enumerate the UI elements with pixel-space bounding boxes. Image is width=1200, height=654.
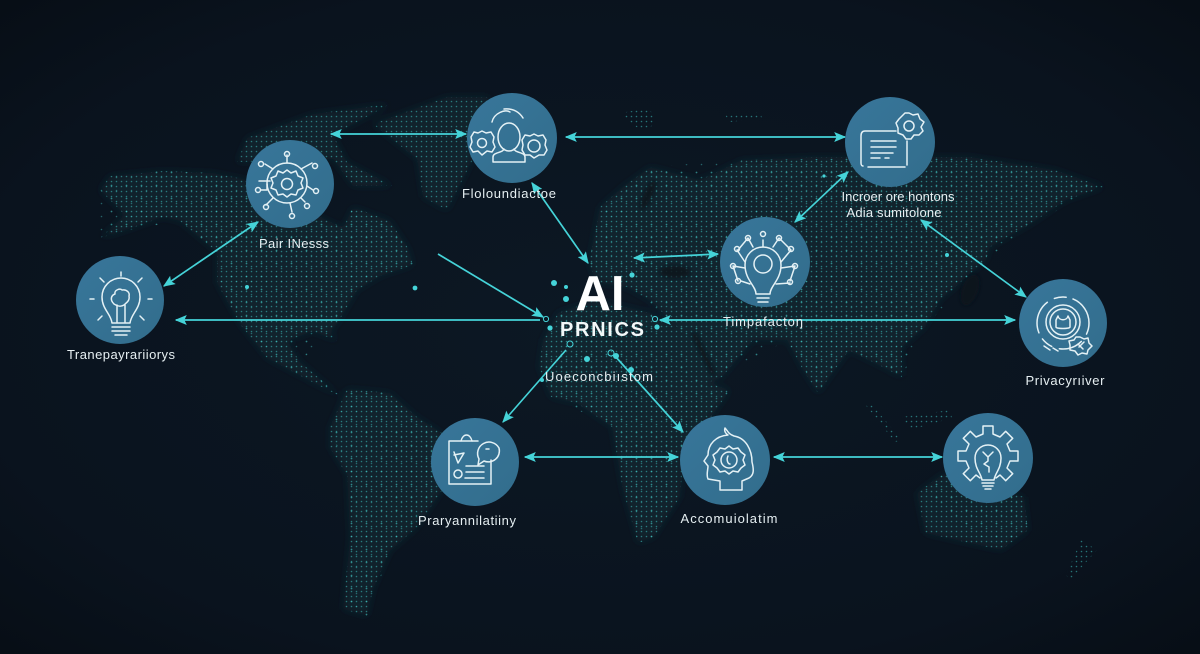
central title: PRNICS <box>560 319 644 341</box>
label: center lower: Uoeconcbiıstom <box>545 369 653 384</box>
icon: clipboard and speech bubble <box>449 435 499 484</box>
label: Accomuiolatim <box>680 511 778 526</box>
node: privacy <box>1019 279 1107 388</box>
node: accountability <box>680 415 778 526</box>
label: Pair INesss <box>259 236 330 251</box>
central title: AI <box>576 267 624 321</box>
connector arrows <box>164 134 1026 457</box>
label: Privacyrıiver <box>1026 373 1105 388</box>
label: Incroer ore hontons <box>842 189 955 204</box>
node: transparency center <box>720 217 810 307</box>
central title <box>560 267 644 341</box>
world map <box>100 97 1104 616</box>
label: Tranepayrariiorys <box>67 347 176 362</box>
icon: document and gear <box>861 113 924 167</box>
label: Adia sumitolone <box>846 205 942 220</box>
icon: head and gears <box>470 109 547 162</box>
icon: bulb network <box>730 232 798 302</box>
node: transparency <box>67 256 176 362</box>
label: Praryannilatiiny <box>418 513 516 528</box>
node: innovation <box>943 413 1033 503</box>
icon: head with gear <box>704 428 753 490</box>
label: center right: Timpafactoŋ <box>723 314 803 329</box>
icon: gear network <box>256 152 318 218</box>
icon: light bulb <box>90 272 152 335</box>
node: fairness <box>246 140 334 251</box>
icon: shield rings <box>1037 297 1092 355</box>
central network dots <box>245 174 949 382</box>
node: foundation <box>462 93 557 201</box>
node: incorporate <box>842 97 955 220</box>
label: Floloundiactoe <box>462 186 556 201</box>
icon: gear with bulb <box>958 426 1018 489</box>
node: prayability <box>418 418 519 528</box>
